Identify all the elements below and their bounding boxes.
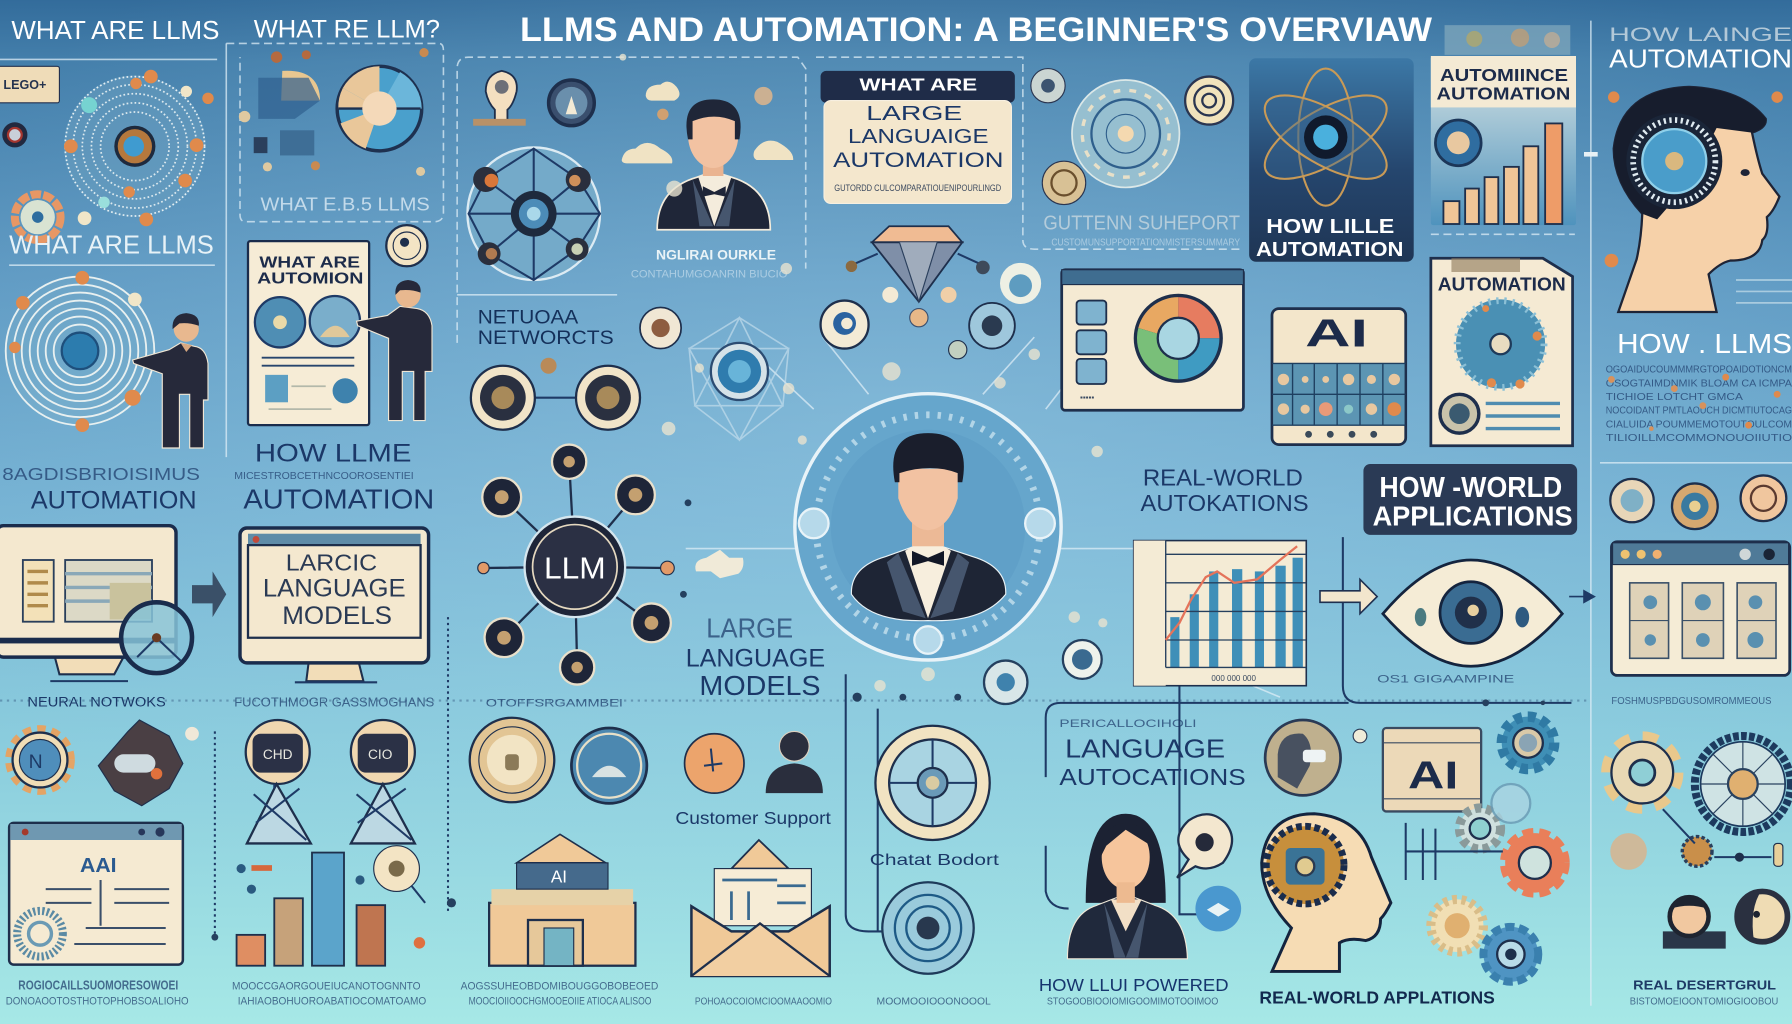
llm card: GUTORDD CULCOMPARATIOUENIPOURLINGD xyxy=(834,183,1001,193)
center portrait xyxy=(793,392,1063,662)
bottom captions: MOOMOOIOOONOOOL xyxy=(877,997,991,1008)
automation bar card: AUTOMATION xyxy=(1437,83,1570,103)
speech balloon xyxy=(374,846,425,903)
atom network xyxy=(689,318,789,440)
llm card: LANGUAIGE xyxy=(848,125,989,148)
neural wheel xyxy=(467,147,600,280)
radar dial xyxy=(882,882,974,974)
paragraph: TICHIOE LOTCHT GMCA xyxy=(1606,392,1743,403)
dashboard: ▪▪▪▪▪ xyxy=(1080,393,1094,402)
neural gear icons: N xyxy=(29,751,43,773)
llm card xyxy=(824,101,1011,203)
what are banner xyxy=(821,71,1015,103)
automation label: AUTOMATION xyxy=(243,484,434,515)
paragraph: OSOGTAIMDNMIK BLOAM CA ICMPA xyxy=(1606,378,1792,389)
scattered detail dots xyxy=(211,54,1706,941)
cloud note xyxy=(695,550,743,578)
large language models text: LARGE xyxy=(706,613,793,644)
real-world heading: REAL-WORLD xyxy=(1143,465,1303,491)
note card: LEGO+ xyxy=(3,78,46,92)
eye xyxy=(1383,560,1562,666)
blue circle icon xyxy=(1195,886,1241,931)
subheading: WHAT ARE LLMS xyxy=(9,230,214,260)
bottom captions: DONOAOOTOSTHOTOPHOBSOALIOHO xyxy=(6,996,189,1008)
woman xyxy=(1067,814,1187,959)
ai grid card xyxy=(1272,309,1406,445)
how world banner xyxy=(1363,464,1577,535)
network label 2: NETWORCTS xyxy=(478,327,614,349)
bulb icon xyxy=(473,71,526,126)
how llms label: HOW LLME xyxy=(255,440,411,468)
ai house xyxy=(489,834,635,966)
llm hub diagram: LLM xyxy=(544,550,606,585)
language monitor: LARCIC xyxy=(286,549,377,575)
paragraph: CIALUIDA POUMMEMOTOUTOULCOM xyxy=(1606,419,1792,430)
small arrow xyxy=(1569,591,1594,602)
diamond xyxy=(846,226,990,327)
dashboard xyxy=(1062,270,1243,410)
bottom captions: ROGIOCAILLSUOMORESOWOEI xyxy=(18,979,178,993)
language monitor: MODELS xyxy=(282,602,392,630)
row captions xyxy=(27,694,1772,709)
real-world caption: REAL-WORLD APPLATIONS xyxy=(1259,987,1495,1007)
head with brain xyxy=(1262,814,1391,971)
how llm powered caption: HOW LLUI POWERED xyxy=(1039,975,1229,995)
llm hub diagram xyxy=(478,445,674,685)
bottom captions: REAL DESERTGRUL xyxy=(1633,979,1776,993)
arrow xyxy=(1320,579,1377,614)
language panel text: PERICALLOCIHOLI xyxy=(1059,718,1197,730)
left monitor xyxy=(0,526,176,681)
paragraph xyxy=(1606,365,1792,444)
person with clouds xyxy=(622,82,793,230)
ai plaque: AI xyxy=(1408,755,1458,798)
ai plaque xyxy=(1383,728,1481,811)
wheel chart xyxy=(337,66,422,151)
customer support label: Customer Support xyxy=(675,808,831,828)
flower icon xyxy=(15,194,61,240)
robot pair xyxy=(246,720,415,843)
accent dots xyxy=(1605,91,1783,429)
column 2 top xyxy=(234,16,440,515)
line chart xyxy=(1134,541,1306,686)
speech bubble xyxy=(1177,814,1232,878)
language monitor xyxy=(240,528,429,682)
bottom captions: MOOCIOIIOOCHGMOOEOIIE ATIOCA ALISOO xyxy=(469,996,652,1008)
helmet badge xyxy=(1265,720,1367,795)
scattered icons xyxy=(239,48,429,176)
bottom captions: AOGSSUHEOBDOMIBOUGGOBOBEOED xyxy=(461,981,658,993)
chatbot dial xyxy=(875,726,990,840)
atom card: HOW LILLE xyxy=(1266,215,1394,238)
ai grid card: AI xyxy=(1305,312,1368,355)
column 1 top xyxy=(0,15,219,515)
bottom captions: BISTOMOEIOONTOMIOGIOOBOU xyxy=(1630,997,1778,1008)
tan shape xyxy=(258,71,320,119)
faint scribble row: 8AGDISBRIOISIMUS xyxy=(2,464,200,484)
right badges xyxy=(1610,475,1786,529)
browser card xyxy=(9,823,183,965)
dark arrow xyxy=(192,571,226,617)
envelope xyxy=(691,840,830,976)
network label: NETUOAA xyxy=(478,306,578,328)
top right blurred strip xyxy=(1445,25,1570,55)
automation label: AUTOMATION xyxy=(31,487,197,515)
paragraph: TILIOILLMCOMMONOUOIIUTIO xyxy=(1606,433,1792,444)
real-world heading: AUTOKATIONS xyxy=(1141,490,1309,516)
browser window with tiles xyxy=(1611,542,1790,675)
automation bar card xyxy=(1431,56,1576,225)
presenter xyxy=(133,313,208,448)
llm card: AUTOMATION xyxy=(833,147,1003,172)
row captions: NEURAL NOTWOKS xyxy=(27,694,166,709)
heading: WHAT ARE LLMS xyxy=(11,15,219,45)
how world banner: HOW -WORLD xyxy=(1379,472,1562,504)
row captions: OTOFFSRGAMMBEI xyxy=(486,697,623,709)
large language models text xyxy=(686,613,825,701)
magnifier xyxy=(121,602,192,673)
how llms label: HOW . LLMS xyxy=(1617,328,1792,359)
neural gear icons xyxy=(10,720,199,806)
small badge xyxy=(2,122,27,147)
column 3 top xyxy=(467,71,793,430)
center column top xyxy=(640,25,1576,446)
head profile xyxy=(1614,87,1779,312)
poster card: AUTOMION xyxy=(257,270,363,287)
atom card xyxy=(1249,58,1414,262)
bottom captions: MOOCCGAORGOUEIUCANOTOGNNTO xyxy=(232,981,421,993)
automation poster: AUTOMATION xyxy=(1438,273,1566,294)
automation bar card: AUTOMIINCE xyxy=(1440,65,1568,85)
bottom captions: STOGOOBIOOIOMIGOOMIMOTOOIMOO xyxy=(1047,997,1218,1008)
row captions: FOSHMUSPBDGUSOMROMMEOUS xyxy=(1611,696,1772,707)
faint caption: WHAT E.B.5 LLMS xyxy=(261,193,430,214)
line chart: 000 000 000 xyxy=(1211,674,1256,683)
gears cluster xyxy=(1406,717,1565,982)
atom card: AUTOMATION xyxy=(1256,238,1403,261)
automation poster xyxy=(1431,258,1573,446)
dotted network circle xyxy=(64,70,214,226)
neural sub caption: CONTAHUMGOANRIN BIUCIO xyxy=(631,269,788,281)
panel caption: GUTTENN SUHEPORT xyxy=(1043,212,1240,235)
ai house: AI xyxy=(551,866,567,886)
node pair xyxy=(471,358,640,430)
person xyxy=(851,433,1006,621)
dark ring icon xyxy=(549,80,594,126)
bottom captions xyxy=(6,979,1778,1008)
bar chart xyxy=(237,853,425,966)
language panel text: LANGUAGE xyxy=(1065,734,1225,764)
large language models text: LANGUAGE xyxy=(686,644,825,672)
scribble row: MICESTROBCETHNCOOROSENTIEI xyxy=(234,471,414,482)
what are banner: WHAT ARE xyxy=(859,74,977,94)
bottom captions: POHOAOCOIOMCIOOMAAOOMIO xyxy=(695,997,832,1008)
robot pair: CHD xyxy=(263,747,293,762)
side badges xyxy=(799,509,1055,654)
language monitor: LANGUAGE xyxy=(263,575,406,603)
right column top xyxy=(1605,24,1792,444)
title: LLMS AND AUTOMATION: A BEGINNER'S OVERVIAW xyxy=(520,11,1433,49)
faint heading: HOW LAINGE xyxy=(1609,24,1792,46)
right people xyxy=(1663,889,1787,949)
browser card: AAI xyxy=(80,854,117,877)
coin icons xyxy=(470,718,647,803)
how world banner: APPLICATIONS xyxy=(1373,501,1573,532)
large language models text: MODELS xyxy=(699,670,821,701)
note card xyxy=(0,66,59,103)
robot pair: CIO xyxy=(368,747,392,762)
neural caption: NGLIRAI OURKLE xyxy=(656,247,776,262)
eye caption: OS1 GIGAAMPINE xyxy=(1377,673,1515,685)
chatbot caption: Chatat Bodort xyxy=(870,852,1000,869)
round badge xyxy=(386,225,427,266)
language panel text: AUTOCATIONS xyxy=(1059,764,1246,790)
llm card: LARGE xyxy=(866,102,962,125)
panel sub caption: CUSTOMUNSUPPORTATIONMISTERSUMMARY xyxy=(1051,238,1240,249)
bottom captions: IAHIAOBOHUOROABATIOCOMATOAMO xyxy=(238,996,426,1008)
heading: WHAT RE LLM? xyxy=(254,16,440,44)
automation heading: AUTOMATION xyxy=(1609,43,1792,73)
head side lines xyxy=(1736,280,1792,303)
row captions: FUCOTHMOGR GASSMOGHANS xyxy=(234,695,434,709)
poster card: WHAT ARE xyxy=(259,254,360,271)
presenter xyxy=(357,280,432,421)
language panel text xyxy=(1059,718,1246,790)
ring diagram xyxy=(5,271,155,432)
poster card xyxy=(248,241,369,425)
right gears xyxy=(1610,736,1791,870)
real-world heading xyxy=(1141,465,1309,516)
customer icons xyxy=(685,731,823,793)
wheel panel xyxy=(1031,69,1233,205)
round badges xyxy=(640,263,1041,359)
